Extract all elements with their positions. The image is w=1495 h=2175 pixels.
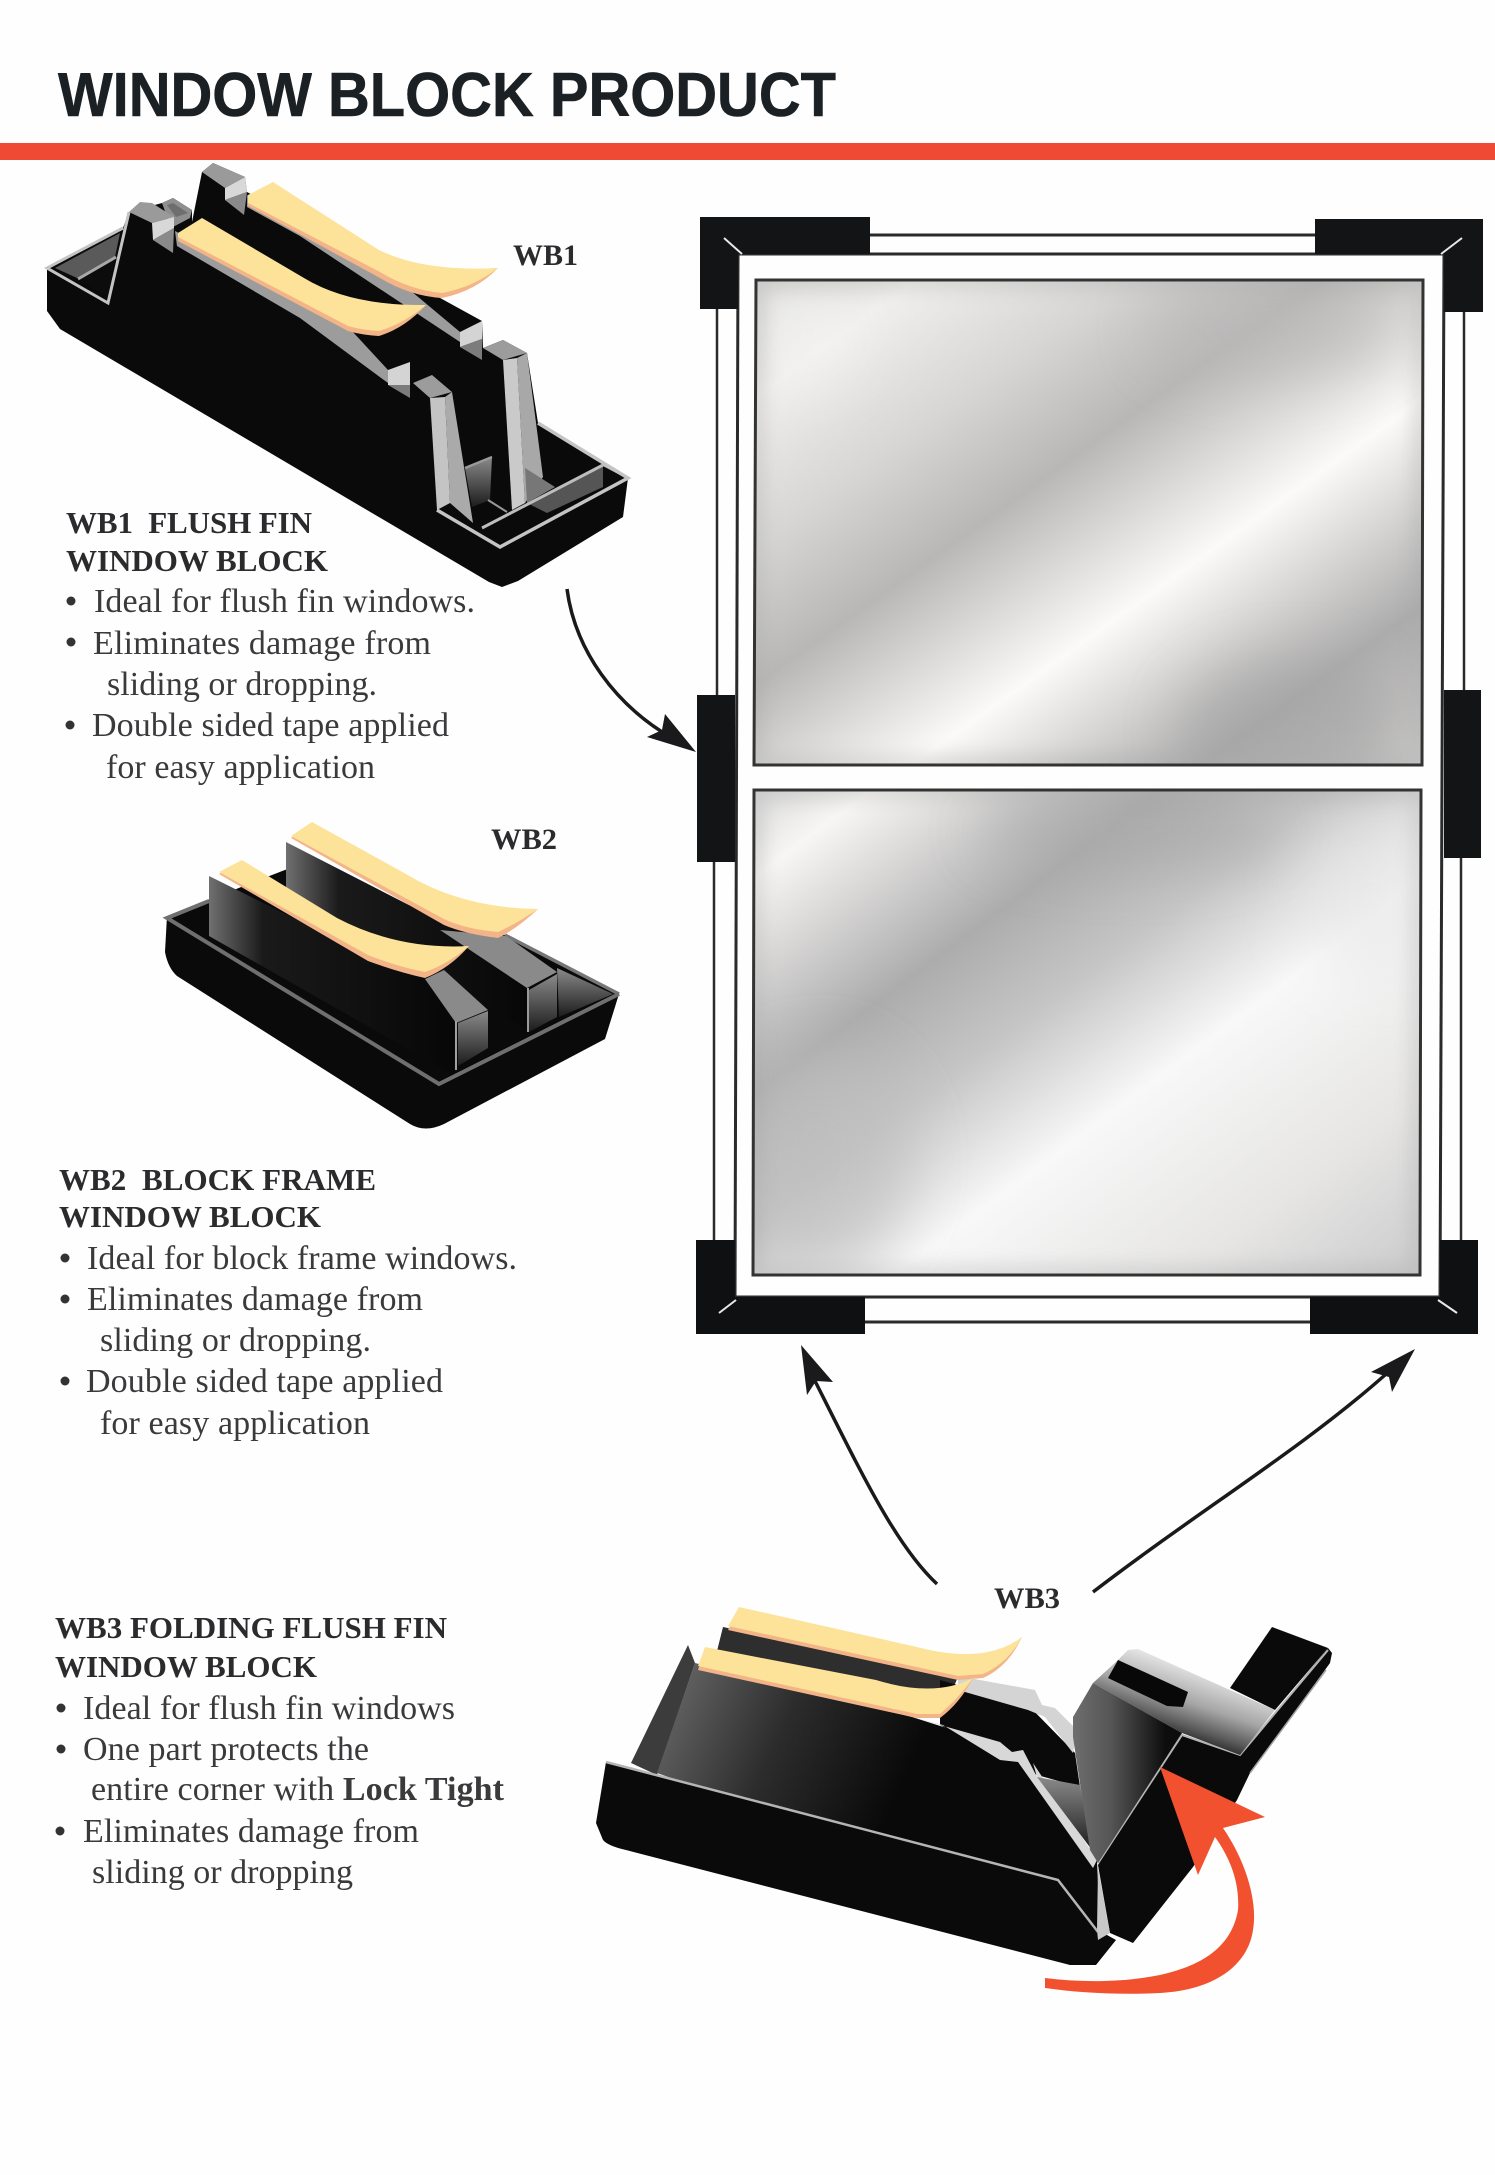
arrow: WB3 to bottom right corner — [1093, 1349, 1415, 1592]
text block: WB1 description: WINDOW BLOCK — [66, 543, 328, 578]
text block: WB2 description: Double sided tape applied — [86, 1363, 443, 1400]
text block: WB1 description: WB1 FLUSH FIN — [66, 505, 312, 540]
pillars — [413, 375, 452, 398]
left tray — [55, 233, 120, 278]
icon: WB2 block frame window block — [165, 822, 619, 1128]
front fin — [657, 1663, 1100, 1930]
upper glass pane — [740, 280, 1423, 800]
text block: WB2 description: sliding or dropping. — [100, 1322, 371, 1359]
lower glass pane — [730, 790, 1440, 1275]
title: WINDOW BLOCK PRODUCT — [58, 61, 836, 130]
arrow: WB3 to bottom left corner — [801, 1345, 937, 1584]
adhesive tape strips — [698, 1607, 1022, 1718]
text block: WB1 description — [66, 505, 475, 786]
arrow: red folding arrow — [1045, 1767, 1265, 1994]
text block: WB2 description: Eliminates damage from — [87, 1281, 423, 1318]
adhesive tape strips — [219, 822, 538, 978]
corner block: top left — [700, 217, 870, 309]
text block: WB2 description: WINDOW BLOCK — [59, 1199, 321, 1234]
fin caps — [202, 163, 245, 188]
text block: WB2 description: WB2 BLOCK FRAME — [59, 1162, 376, 1197]
text block: WB3 description: Eliminates damage from — [83, 1813, 419, 1850]
top right flap — [1230, 1627, 1328, 1710]
rear panel — [631, 1645, 695, 1775]
arrow: WB1 to window side — [567, 589, 696, 752]
tray inserts — [465, 457, 492, 507]
text block: WB1 description: sliding or dropping. — [107, 666, 377, 703]
text block: WB3 description: Ideal for flush fin windows — [83, 1690, 455, 1727]
text block: WB2 description: Ideal for block frame windows. — [87, 1240, 517, 1277]
front wall — [596, 1762, 1116, 1965]
side block: right — [1444, 690, 1481, 858]
folding V piece — [1073, 1683, 1182, 1863]
flap with slot — [1093, 1649, 1275, 1755]
text block: WB3 description: WINDOW BLOCK — [55, 1649, 317, 1684]
text block: WB2 description: for easy application — [100, 1405, 370, 1442]
label: WB3: WB3 — [994, 1582, 1060, 1615]
text block: WB1 description: Ideal for flush fin windows. — [94, 583, 475, 620]
window diagram — [696, 217, 1483, 1334]
label: WB2: WB2 — [491, 823, 557, 856]
window frame lines — [714, 235, 1464, 1322]
label: WB1: WB1 — [513, 239, 578, 272]
adhesive tape strips — [178, 182, 498, 336]
text block: WB3 description: entire corner with Lock Tight — [91, 1771, 505, 1808]
red header rule — [0, 143, 1495, 160]
text block: WB2 description — [59, 1162, 517, 1442]
text block: WB1 description: Double sided tape applied — [92, 707, 449, 744]
icon: WB3 folding flush fin window block — [596, 1607, 1332, 1965]
text block: WB3 description: One part protects the — [83, 1731, 369, 1768]
side block: left — [697, 695, 735, 862]
corner block: bottom right — [1310, 1240, 1478, 1334]
right side wall — [1098, 1648, 1332, 1943]
fin top strips — [247, 195, 460, 342]
text block: WB3 description — [55, 1610, 505, 1891]
text block: WB1 description: Eliminates damage from — [93, 625, 431, 662]
corner block: top right — [1315, 219, 1483, 312]
corner block: bottom left — [696, 1240, 865, 1334]
icon: WB1 flush fin window block — [47, 163, 628, 587]
fold strip — [1097, 1868, 1110, 1940]
text block: WB1 description: for easy application — [106, 749, 375, 786]
text block: WB3 description: WB3 FOLDING FLUSH FIN — [55, 1610, 447, 1645]
back fin — [716, 1627, 958, 1700]
text block: WB3 description: sliding or dropping — [92, 1854, 353, 1891]
